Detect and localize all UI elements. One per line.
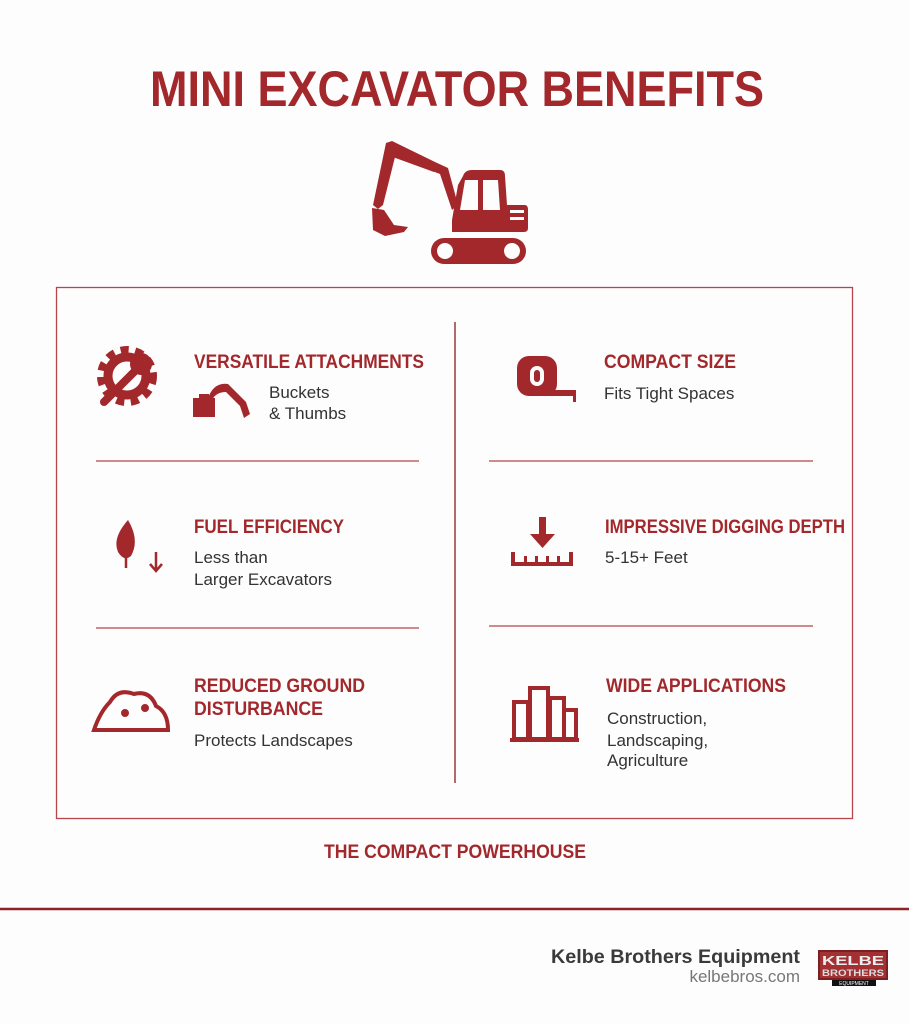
item: versatile attachments [101,350,424,423]
item: wide applications: Construction, [607,709,707,728]
panel: benefits box [56,288,852,818]
item: fuel efficiency: Larger Excavators [194,570,332,589]
item: digging depth: IMPRESSIVE DIGGING DEPTH [605,517,845,538]
item: fuel efficiency [116,517,344,589]
item: digging depth [511,517,845,567]
title: MINI EXCAVATOR BENEFITS [150,61,764,117]
item: reduced ground disturbance [94,676,365,750]
logo [818,950,888,987]
icon: claw [193,384,250,418]
logo: KELBE [822,953,884,968]
item: wide applications [510,676,786,770]
icon: gear wrench [101,350,153,402]
item: compact size: Fits Tight Spaces [604,384,734,403]
icon: excavator [372,141,528,264]
item: fuel efficiency: FUEL EFFICIENCY [194,517,344,538]
logo: BROTHERS [822,968,884,978]
logo: EQUIPMENT [839,981,869,987]
item: compact size: COMPACT SIZE [604,352,736,373]
item: compact size [517,352,736,403]
icon: leaf arrow [116,520,162,571]
item: wide applications: Landscaping, [607,731,708,750]
item: versatile attachments: Buckets [269,383,329,402]
icon: dig arrow ruler [511,517,573,566]
icon: soil mound [94,692,168,730]
item: digging depth: 5-15+ Feet [605,548,688,567]
item: versatile attachments: & Thumbs [269,404,346,423]
tagline: THE COMPACT POWERHOUSE [324,842,586,863]
item: reduced ground disturbance: Protects Landscapes [194,731,353,750]
footer brand text: kelbebros.com [689,967,800,986]
item: fuel efficiency: Less than [194,548,268,567]
footer brand text [551,947,801,986]
icon: buildings [510,688,579,740]
item: reduced ground disturbance: REDUCED GROUND [194,676,365,697]
icon: tape measure [517,356,576,402]
item: versatile attachments: VERSATILE ATTACHMENTS [194,352,424,373]
footer brand text: Kelbe Brothers Equipment [551,947,801,968]
item: wide applications: WIDE APPLICATIONS [606,676,786,697]
item: wide applications: Agriculture [607,751,688,770]
item: reduced ground disturbance: DISTURBANCE [194,699,323,720]
